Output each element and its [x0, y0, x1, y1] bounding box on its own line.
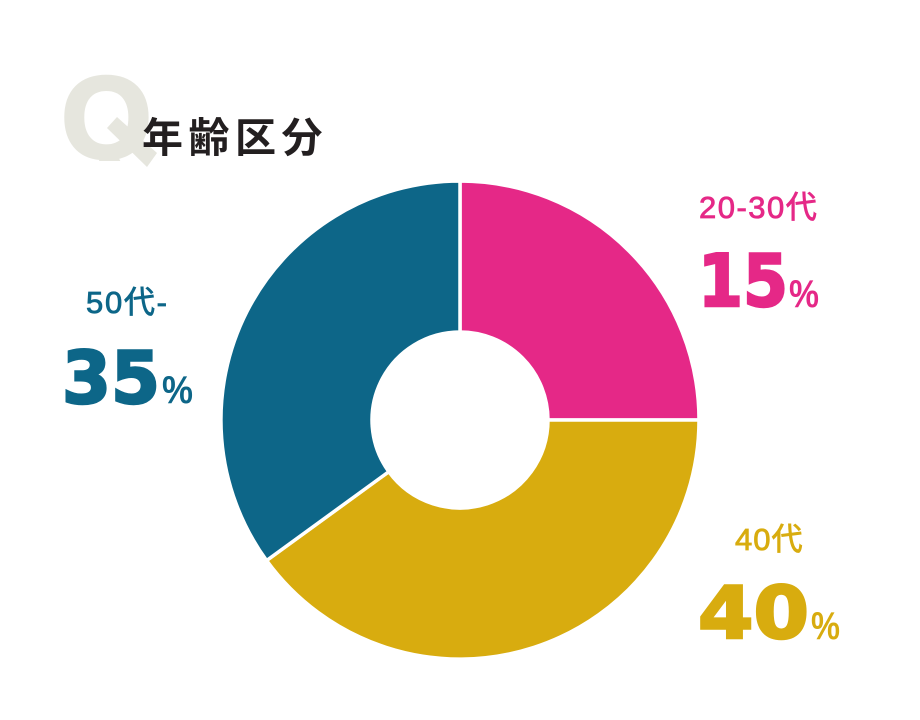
heading: Q mark and title [64, 74, 322, 167]
category label: 50代- [86, 285, 169, 320]
donut chart [221, 181, 699, 659]
percentage value: 15 [698, 239, 788, 323]
heading text: 年齢区分 [142, 115, 328, 161]
heading mark: Q: Q [61, 52, 152, 183]
label: 20-30代 15% [698, 190, 819, 323]
percentage value: 40 [698, 571, 809, 655]
label: 40代 40% [698, 522, 840, 655]
category label: 40代 [735, 522, 803, 557]
segment: 40代 40% [267, 420, 699, 659]
segment: 50代- 35% [221, 181, 460, 560]
label: 50代- 35% [62, 285, 193, 420]
percent sign: % [789, 273, 819, 316]
percent sign: % [811, 605, 840, 648]
percentage value: 35 [62, 336, 160, 420]
percent sign: % [162, 369, 193, 412]
segment: 20-30代 15% [460, 181, 699, 420]
category label: 20-30代 [699, 190, 818, 225]
Q tail [107, 117, 157, 167]
